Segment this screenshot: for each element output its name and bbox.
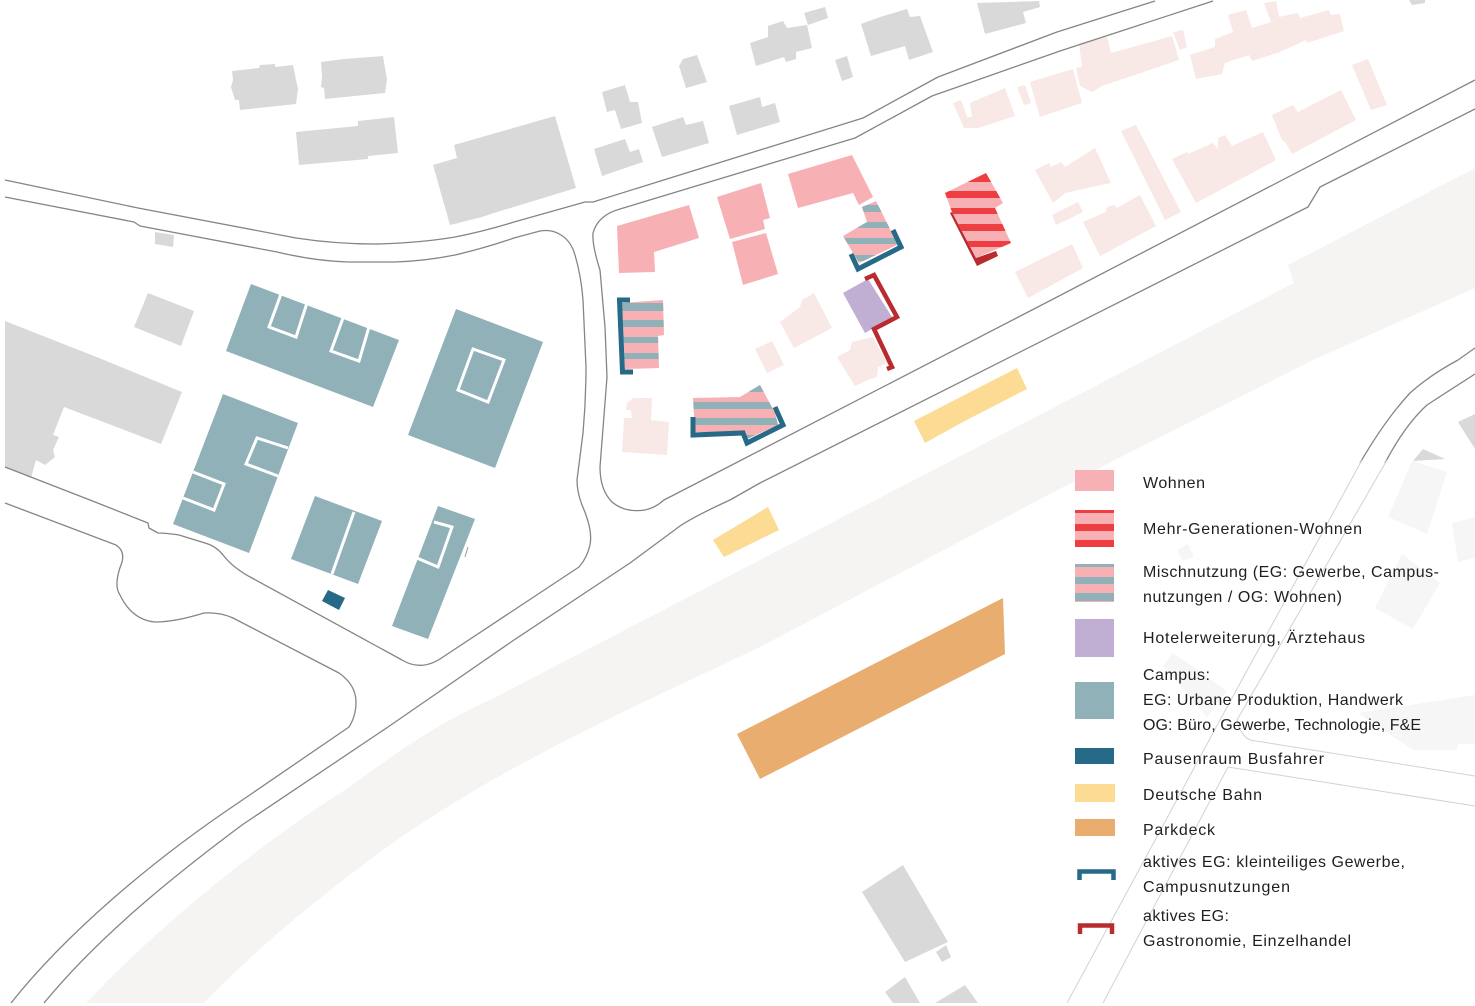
hotel extension building [843, 275, 897, 369]
Deutsche Bahn buildings [713, 368, 1027, 557]
legend label: aktives EG Gewerbe [1143, 854, 1405, 896]
legend label: aktives EG Gastronomie: aktives EG: [1143, 908, 1229, 925]
legend [1075, 470, 1439, 950]
legend label: Parkdeck: Parkdeck [1143, 822, 1216, 839]
legend swatch: active ground floor gastronomy bracket [1080, 926, 1112, 934]
panel: residential buildings [617, 155, 873, 285]
legend label: aktives EG Gastronomie: Gastronomie, Einzelhandel [1143, 933, 1351, 950]
legend label: Campus: EG: Urbane Produktion, Handwerk [1143, 692, 1404, 709]
legend swatch: Campus [1075, 682, 1114, 719]
legend swatch: Parkdeck [1075, 819, 1115, 836]
Parkdeck [737, 598, 1005, 779]
mixed-use building north [840, 200, 901, 270]
legend label: aktives EG Gastronomie [1143, 908, 1351, 950]
panel: campus buildings [173, 284, 543, 639]
existing buildings behind legend, faded [1163, 461, 1475, 750]
legend label: Wohnen: Wohnen [1143, 475, 1205, 492]
legend label: Campus: OG: Büro, Gewerbe, Technologie, F&E [1143, 717, 1421, 734]
legend label: Deutsche Bahn: Deutsche Bahn [1143, 787, 1262, 804]
railway corridor band [86, 168, 1475, 1003]
legend swatch: Wohnen [1075, 470, 1114, 491]
legend swatch: Mehr-Generationen-Wohnen [1075, 510, 1114, 547]
existing buildings: faded pink [622, 1, 1387, 455]
legend label: Mischnutzung: nutzungen / OG: Wohnen) [1143, 589, 1342, 606]
legend swatch: active ground floor commerce bracket [1080, 872, 1114, 880]
legend label: Mehr-Generationen-Wohnen: Mehr-Generationen-Wohnen [1143, 521, 1362, 538]
mixed-use building south [690, 383, 783, 443]
legend swatch: Pausenraum [1075, 748, 1114, 764]
legend label: aktives EG Gewerbe: aktives EG: kleinteiliges Gewerbe, [1143, 854, 1405, 871]
campus building south centre [291, 496, 382, 584]
legend swatch: Deutsche Bahn [1075, 784, 1115, 802]
campus building north [226, 284, 399, 407]
legend label: Mischnutzung: Mischnutzung (EG: Gewerbe, Campus- [1143, 564, 1439, 581]
campus building west [173, 394, 298, 553]
legend label: Pausenraum: Pausenraum Busfahrer [1143, 751, 1325, 768]
campus building south east [392, 506, 475, 639]
legend label: Hotelerweiterung: Hotelerweiterung, Ärztehaus [1143, 629, 1365, 647]
legend label: aktives EG Gewerbe: Campusnutzungen [1143, 879, 1290, 896]
campus building east [408, 309, 543, 468]
Pausenraum Busfahrer building [322, 590, 345, 610]
legend label: Campus: Campus: [1143, 667, 1210, 684]
legend label: Mischnutzung [1143, 564, 1439, 606]
legend swatch: Hotelerweiterung [1075, 619, 1114, 657]
legend label: Campus [1143, 667, 1421, 734]
multi-generation housing building [945, 173, 1011, 266]
legend swatch: Mischnutzung [1075, 564, 1114, 602]
mixed-use building west [620, 298, 668, 372]
